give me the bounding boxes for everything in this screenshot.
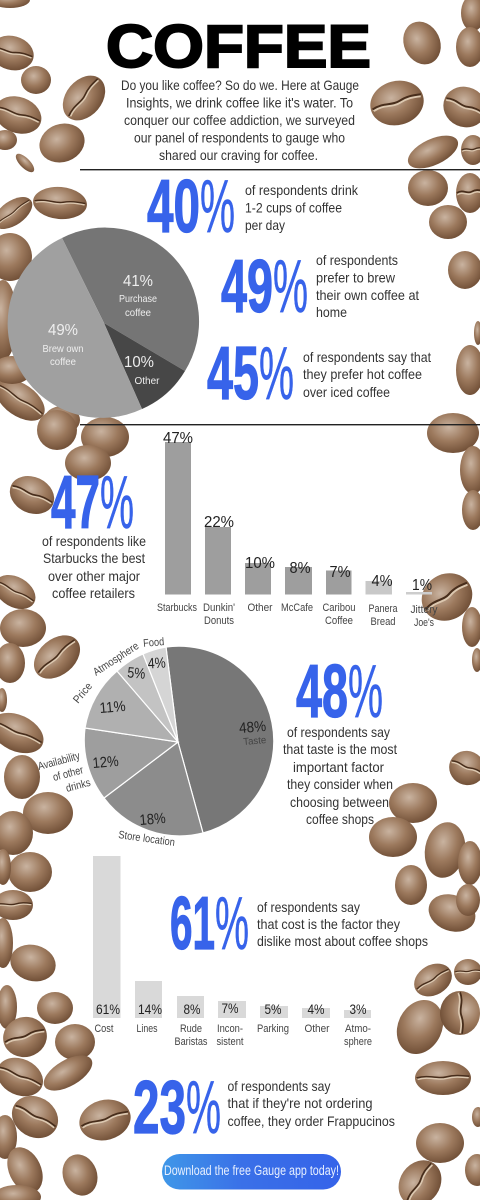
stat: 23% Frappucinos: 23% — [133, 1065, 221, 1149]
pie chart: factors when choosing a coffee shop — [37, 636, 274, 849]
stat: 48% taste: choosing between — [290, 794, 389, 810]
bar chart: dislikes about coffee shops: Atmo- — [345, 1023, 371, 1035]
pie chart: factors when choosing a coffee shop: of other — [52, 764, 85, 784]
stat: 45% hot coffee: 45% — [207, 331, 294, 415]
stat: 61% cost: 61% — [170, 881, 249, 965]
stat: 47% Starbucks: of respondents like — [42, 533, 146, 549]
bar chart: dislikes about coffee shops: Other — [304, 1023, 330, 1035]
stat: 49% brew at home: their own coffee at — [316, 287, 419, 303]
pie chart: factors when choosing a coffee shop: Store location — [118, 829, 176, 849]
background: coffee beans left edge — [0, 0, 135, 1200]
stat: 49% brew at home — [221, 244, 419, 328]
bar chart: dislikes about coffee shops: 7% — [222, 1000, 238, 1016]
stat: 61% cost — [170, 881, 428, 965]
bar chart: dislikes about coffee shops: sphere — [344, 1036, 372, 1048]
stat: 49% brew at home: of respondents — [316, 252, 398, 268]
title: COFFEE — [106, 13, 371, 80]
pie chart: brew vs purchase: Other — [134, 375, 160, 387]
stat: 49% brew at home: prefer to brew — [316, 270, 396, 286]
stat: 61% cost: dislike most about coffee shops — [257, 933, 428, 949]
bar chart: dislikes about coffee shops: 8% — [184, 1001, 200, 1017]
stat: 23% Frappucinos — [133, 1065, 395, 1149]
stat: 48% taste: they consider when — [287, 776, 393, 792]
bar chart: favourite retailers: Bread — [370, 616, 396, 628]
bar chart: favourite retailers: 47% — [163, 430, 193, 447]
stat: 47% Starbucks — [42, 460, 146, 601]
pie chart: factors when choosing a coffee shop: Availability — [37, 750, 82, 773]
pie chart: brew vs purchase: 10% — [124, 354, 154, 371]
bar chart: favourite retailers: Donuts — [204, 615, 234, 627]
stat: 23% Frappucinos: that if they're not ordering — [228, 1095, 372, 1111]
pie chart: brew vs purchase: 49% — [48, 322, 78, 339]
bar chart: dislikes about coffee shops — [93, 856, 372, 1048]
bar chart: favourite retailers: 22% — [204, 514, 234, 531]
bar chart: dislikes about coffee shops: Lines — [136, 1023, 158, 1035]
stat: 45% hot coffee: of respondents say that — [303, 349, 431, 365]
bar chart: favourite retailers: Jittery — [410, 604, 438, 616]
intro text: conquer our coffee addiction, we surveyed — [124, 112, 355, 128]
pie chart: brew vs purchase: Purchase — [119, 293, 157, 305]
stat: 48% taste: that taste is the most — [283, 741, 397, 757]
bar chart: favourite retailers: 10% — [245, 555, 275, 572]
bar chart: favourite retailers: Joe's — [414, 617, 434, 629]
stat: 45% hot coffee — [207, 331, 431, 415]
intro text: Insights, we drink coffee like it's water. To — [126, 94, 353, 110]
bar chart: favourite retailers: Coffee — [325, 615, 353, 627]
bar chart: dislikes about coffee shops: 3% — [350, 1001, 366, 1017]
bar chart: dislikes about coffee shops: Cost — [94, 1023, 114, 1035]
bar chart: favourite retailers: Other — [248, 602, 273, 614]
bar chart: favourite retailers: Starbucks — [157, 602, 197, 614]
bar chart: favourite retailers: 4% — [372, 573, 392, 590]
bar chart: favourite retailers: McCafe — [281, 602, 313, 614]
stat: 48% taste: of respondents say — [287, 724, 390, 740]
button: download app — [162, 1154, 341, 1190]
pie chart: factors when choosing a coffee shop: Atmosphere — [91, 640, 141, 679]
pie chart: brew vs purchase — [8, 228, 199, 418]
button: download app: Download the free Gauge app today! — [164, 1163, 339, 1178]
bar chart: dislikes about coffee shops: 5% — [264, 1001, 282, 1017]
bar chart: dislikes about coffee shops: Incon- — [217, 1023, 243, 1035]
pie chart: factors when choosing a coffee shop: 12% — [92, 753, 119, 772]
stat: 47% Starbucks: 47% — [51, 460, 134, 544]
stat: 48% taste — [283, 649, 397, 827]
stat: 48% taste: coffee shops — [306, 811, 374, 827]
bar chart: favourite retailers — [157, 430, 438, 629]
stat: 48% taste: important factor — [293, 759, 384, 775]
intro text — [121, 77, 359, 163]
intro text: Do you like coffee? So do we. Here at Gauge — [121, 77, 359, 93]
stat: 40% cups per day: 1-2 cups of coffee — [245, 200, 342, 216]
intro text: our panel of respondents to gauge who — [134, 130, 345, 146]
bar chart: favourite retailers: Panera — [368, 603, 398, 615]
intro text: shared our craving for coffee. — [159, 147, 318, 163]
pie chart: factors when choosing a coffee shop: 5% — [127, 664, 146, 683]
bar chart: dislikes about coffee shops: sistent — [216, 1036, 244, 1048]
stat: 61% cost: that cost is the factor they — [257, 916, 400, 932]
bar chart: favourite retailers: Dunkin' — [203, 602, 235, 614]
stat: 48% taste: 48% — [296, 649, 383, 733]
bar chart: favourite retailers: 1% — [412, 577, 432, 594]
stat: 40% cups per day: per day — [245, 217, 285, 233]
pie chart: factors when choosing a coffee shop: Food — [143, 636, 165, 650]
pie chart: factors when choosing a coffee shop: 48% — [238, 718, 267, 737]
bar chart: favourite retailers: 8% — [290, 560, 310, 577]
stat: 45% hot coffee: they prefer hot coffee — [303, 366, 422, 382]
pie chart: factors when choosing a coffee shop: 4% — [147, 655, 166, 672]
stat: 49% brew at home: home — [316, 304, 347, 320]
pie chart: brew vs purchase: coffee — [125, 307, 151, 319]
pie chart: factors when choosing a coffee shop: Price — [71, 681, 95, 706]
stat: 47% Starbucks: over other major — [48, 568, 140, 584]
background: coffee beans right edge — [365, 0, 480, 1200]
pie chart: brew vs purchase: Brew own — [42, 343, 84, 355]
bar chart: dislikes about coffee shops: Rude — [180, 1023, 202, 1035]
pie chart: brew vs purchase: coffee — [50, 356, 76, 368]
stat: 47% Starbucks: Starbucks the best — [43, 550, 145, 566]
bar chart: favourite retailers: Caribou — [322, 602, 356, 614]
stat: 40% cups per day: of respondents drink — [245, 182, 359, 198]
bar chart: dislikes about coffee shops: 4% — [308, 1001, 324, 1017]
stat: 45% hot coffee: over iced coffee — [303, 384, 390, 400]
pie chart: factors when choosing a coffee shop: 11% — [99, 698, 126, 717]
stat: 49% brew at home: 49% — [221, 244, 308, 328]
bar chart: dislikes about coffee shops: Parking — [257, 1023, 289, 1035]
pie chart: factors when choosing a coffee shop: drinks — [65, 777, 92, 795]
stat: 23% Frappucinos: coffee, they order Frappucinos — [228, 1113, 395, 1129]
stat: 23% Frappucinos: of respondents say — [228, 1078, 330, 1094]
pie chart: factors when choosing a coffee shop: 18% — [139, 810, 166, 829]
pie chart: brew vs purchase: 41% — [123, 273, 153, 290]
pie chart: factors when choosing a coffee shop: Taste — [243, 735, 267, 748]
stat: 47% Starbucks: coffee retailers — [52, 585, 135, 601]
bar chart: dislikes about coffee shops: 14% — [138, 1001, 162, 1017]
stat: 40% cups per day — [147, 164, 359, 248]
bar chart: favourite retailers: 7% — [330, 564, 350, 581]
stat: 61% cost: of respondents say — [257, 899, 360, 915]
stat: 40% cups per day: 40% — [147, 164, 235, 248]
bar chart: dislikes about coffee shops: Baristas — [174, 1036, 208, 1048]
bar chart: dislikes about coffee shops: 61% — [96, 1001, 120, 1017]
